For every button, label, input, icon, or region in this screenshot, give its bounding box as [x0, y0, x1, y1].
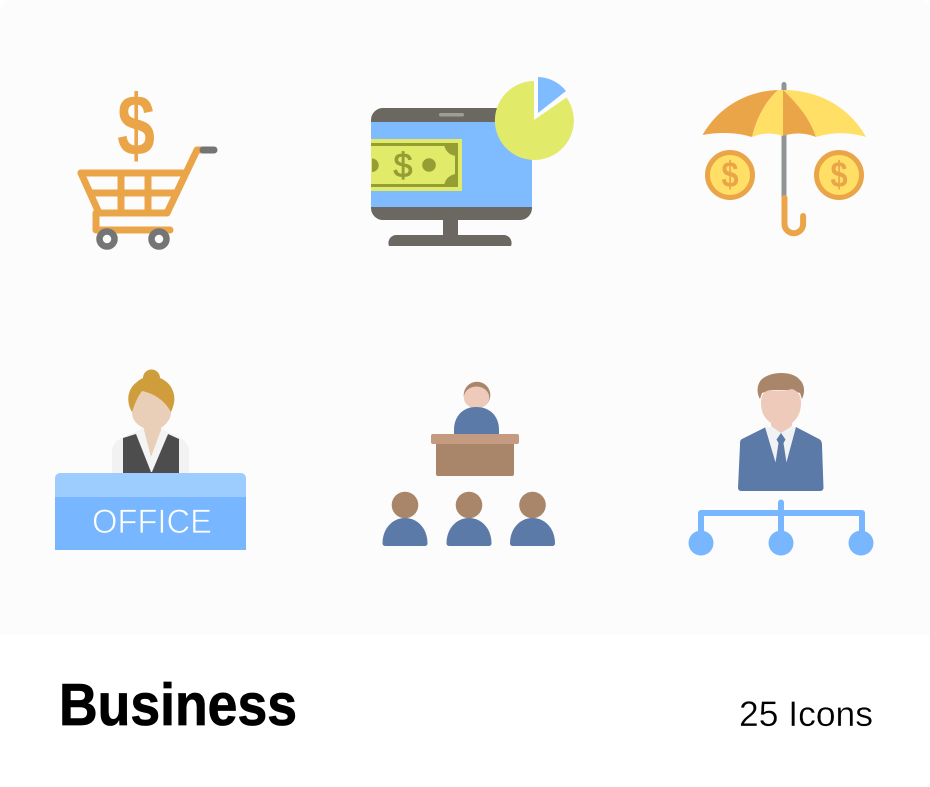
collar	[137, 427, 168, 472]
dollar sign: $	[117, 78, 155, 174]
pie slice	[538, 77, 566, 113]
icon: office receptionist	[55, 370, 246, 550]
banknote: $	[394, 147, 413, 185]
podium base	[436, 444, 514, 476]
hierarchy node right	[848, 530, 874, 556]
title: Business	[59, 672, 297, 738]
receptionist shirt	[112, 429, 189, 473]
podium top	[431, 434, 519, 444]
icon count: 25 Icons	[739, 695, 873, 734]
left coin: $	[721, 156, 739, 196]
cart frame	[81, 150, 203, 230]
banknote	[371, 139, 462, 191]
cart handle	[203, 146, 214, 154]
right coin: $	[830, 156, 848, 196]
icon: shopping cart with dollar	[81, 78, 214, 246]
hierarchy node centre	[768, 530, 794, 556]
hierarchy node left	[688, 530, 714, 556]
office label: OFFICE	[92, 503, 212, 541]
cart wheels	[100, 232, 166, 246]
tie	[775, 433, 787, 466]
manager suit	[738, 427, 824, 491]
manager hair	[758, 373, 804, 399]
monitor stand	[388, 218, 512, 246]
monitor body	[371, 108, 532, 220]
desk top	[55, 473, 246, 497]
audience member centre	[446, 492, 492, 546]
desk front	[55, 497, 246, 550]
receptionist vest	[123, 434, 179, 473]
hierarchy connectors	[701, 502, 862, 543]
receptionist face and neck	[132, 391, 171, 457]
shirt collar	[765, 427, 796, 464]
pie chart	[495, 81, 574, 160]
receptionist hair	[128, 370, 174, 412]
monitor screen	[371, 122, 532, 207]
icon: presenter and audience	[382, 382, 555, 546]
webcam bar	[439, 113, 464, 116]
icon: manager with hierarchy	[688, 373, 874, 556]
icon: umbrella with coins	[702, 82, 866, 233]
manager face	[761, 389, 801, 433]
icon: monitor with banknote and pie chart	[371, 77, 574, 246]
left coin	[708, 152, 752, 198]
umbrella canopy	[702, 90, 866, 137]
audience member right	[510, 492, 555, 546]
umbrella pole	[782, 82, 786, 200]
audience member left	[382, 492, 428, 546]
right coin	[816, 152, 862, 198]
presenter	[454, 382, 499, 436]
infographic canvas	[55, 77, 874, 726]
umbrella handle	[784, 198, 803, 233]
